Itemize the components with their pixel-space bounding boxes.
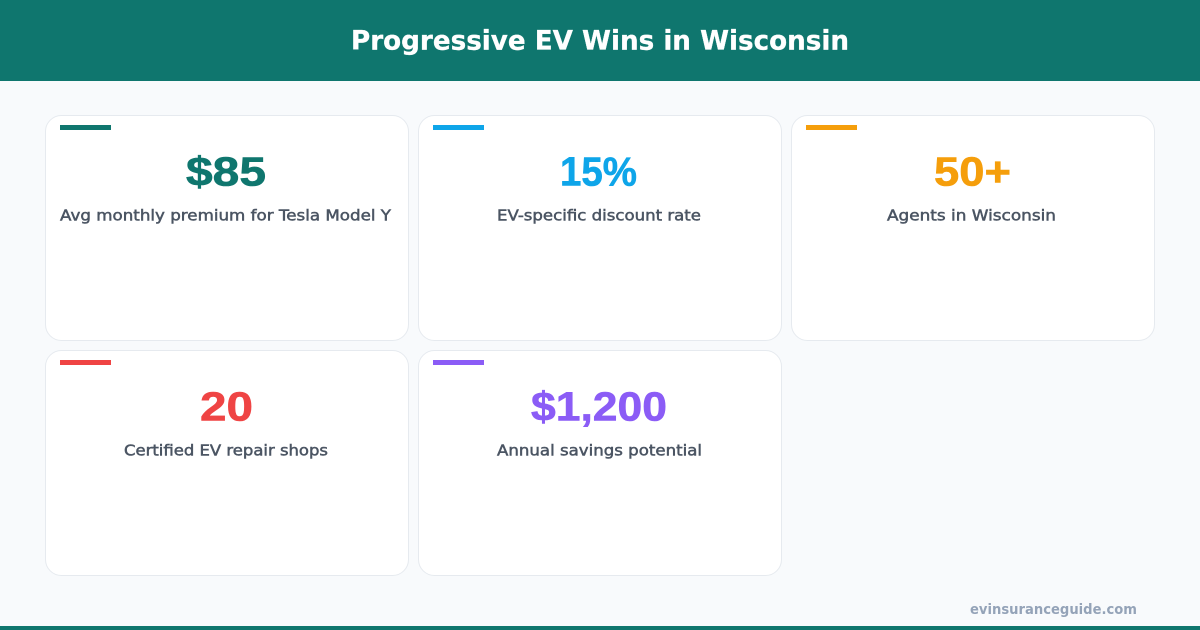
footer source: evinsuranceguide.com [970, 602, 1137, 618]
panel: annual savings [418, 350, 782, 576]
bottom bar [0, 626, 1200, 630]
label: savings: Annual savings potential [497, 442, 702, 460]
panel: repair shops [46, 350, 408, 576]
label: agents: Agents in Wisconsin [887, 206, 1056, 224]
header banner [0, 0, 1200, 81]
label: premium: Avg monthly premium for Tesla Model Y [60, 206, 392, 224]
stat: $1,200: $1,200 [531, 384, 667, 430]
label: repair shops: Certified EV repair shops [124, 442, 328, 460]
stat: 15%: 15% [560, 148, 637, 194]
panel: average monthly premium [46, 116, 408, 340]
stat: $85: $85 [186, 148, 266, 194]
stat: 50+: 50+ [934, 148, 1011, 194]
panel: agents [792, 116, 1154, 340]
stat: 20: 20 [200, 384, 253, 430]
title: Progressive EV Wins in Wisconsin [351, 26, 849, 56]
label: discount: EV-specific discount rate [497, 206, 701, 224]
panel: discount rate [418, 116, 782, 340]
